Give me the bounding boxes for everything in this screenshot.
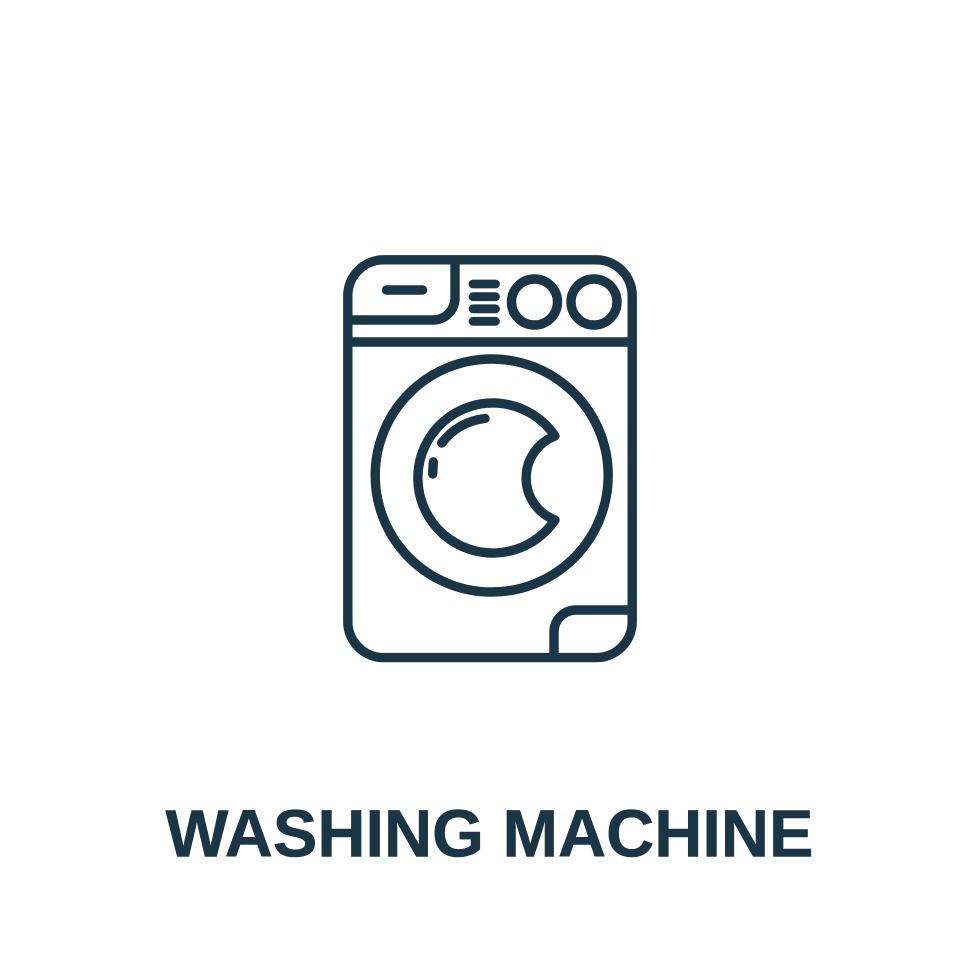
glass highlight dot: [428, 462, 438, 474]
detergent drawer: [348, 260, 455, 320]
door outer ring: [375, 359, 608, 592]
control panel divider: [348, 337, 632, 347]
icon: washing machine: [348, 260, 632, 658]
glass highlight arc: [442, 418, 485, 443]
right dial: [571, 279, 617, 325]
machine body outline: [348, 260, 632, 658]
bottom corner hatch: [554, 610, 632, 657]
door glass with laundry crescent: [418, 403, 555, 553]
left dial: [512, 279, 558, 325]
drawer handle: [386, 285, 422, 295]
control buttons stack: [473, 284, 496, 321]
title: WASHING MACHINE: [166, 796, 814, 872]
